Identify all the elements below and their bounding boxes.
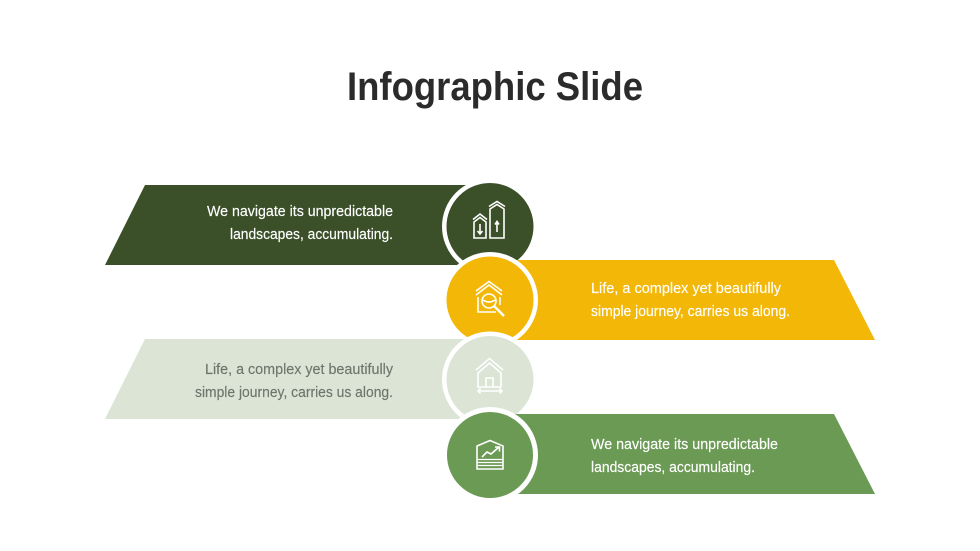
text: step 2: simple journey, carries us along. (591, 303, 790, 320)
icon: two houses with arrows (473, 202, 505, 238)
text: step 1: We navigate its unpredictable (207, 203, 393, 220)
text: step 1 (207, 203, 393, 243)
panel: step 1 dark green (105, 181, 536, 272)
panel: step 2 yellow (444, 254, 875, 346)
banner: step 4 (500, 414, 875, 494)
panel: step 4 green (444, 410, 875, 500)
circle: step 4 (444, 410, 536, 500)
banner: step 3 (105, 339, 480, 419)
text: step 2 (591, 280, 790, 320)
text: step 3 (195, 361, 393, 401)
text: step 4: We navigate its unpredictable (591, 436, 778, 453)
panel: step 3 pale green (105, 334, 536, 425)
circle: step 3 (444, 334, 536, 425)
banner: step 1 (105, 185, 480, 265)
icon: house with rising chart (477, 440, 503, 469)
icon: house with width arrow (476, 358, 503, 394)
text: step 4 (591, 436, 778, 476)
text: step 3: Life, a complex yet beautifully (205, 361, 393, 378)
text: step 4: landscapes, accumulating. (591, 459, 755, 476)
icon: house with magnifier (476, 282, 504, 316)
text: step 3: simple journey, carries us along. (195, 384, 393, 401)
text: step 1: landscapes, accumulating. (230, 226, 393, 243)
banner: step 2 (500, 260, 875, 340)
circle: step 1 (444, 181, 536, 272)
text: step 2: Life, a complex yet beautifully (591, 280, 781, 297)
circle: step 2 (444, 254, 536, 346)
title: Infographic Slide (347, 65, 643, 109)
